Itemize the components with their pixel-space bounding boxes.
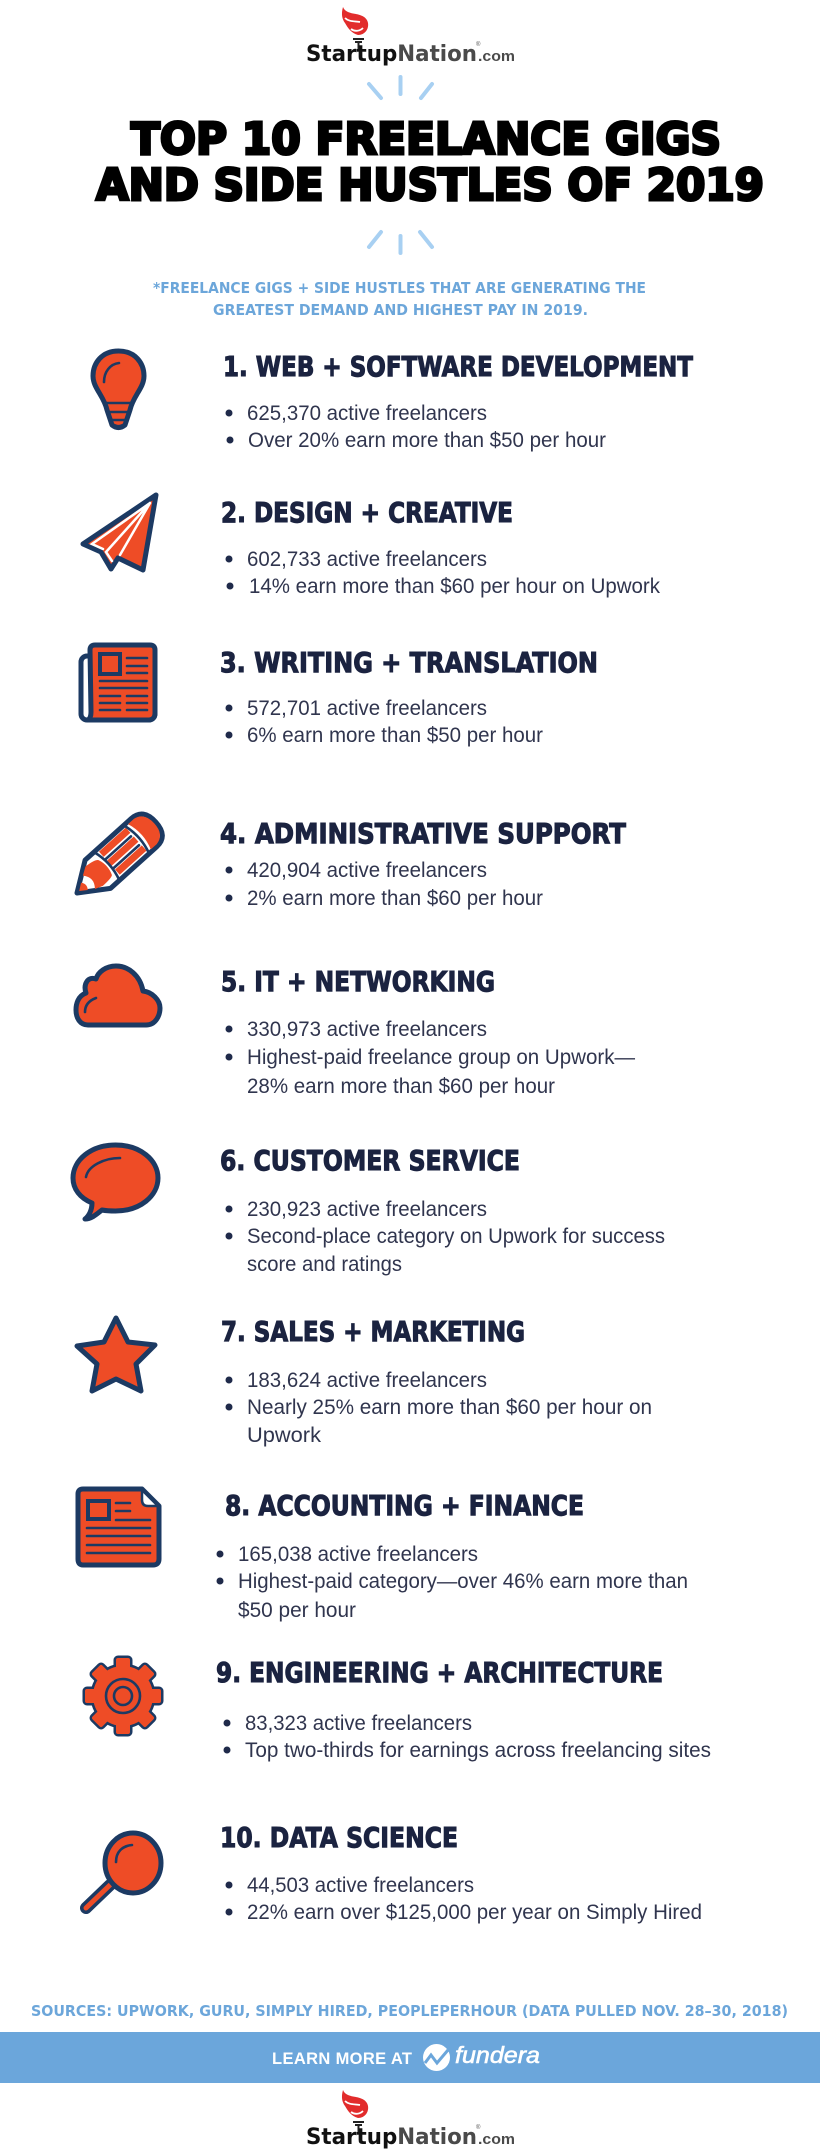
text block 3 <box>226 696 543 747</box>
text block 3: 6% earn more than $50 per hour <box>247 723 543 747</box>
call to action band <box>0 2032 820 2083</box>
text block 8: $50 per hour <box>238 1598 356 1622</box>
text block 7: Nearly 25% earn more than $60 per hour on <box>247 1395 652 1419</box>
text block 2 <box>226 547 660 598</box>
heading 6: 6. CUSTOMER SERVICE <box>220 1144 520 1177</box>
text block 6: 230,923 active freelancers <box>247 1197 487 1221</box>
item 7: sales and marketing <box>77 1315 652 1447</box>
heading 7: 7. SALES + MARKETING <box>221 1315 525 1348</box>
heading 10: 10. DATA SCIENCE <box>220 1821 458 1854</box>
text block 8: Highest-paid category—over 46% earn more than <box>238 1569 688 1593</box>
text block 5: 28% earn more than $60 per hour <box>247 1074 555 1098</box>
text block 10: 44,503 active freelancers <box>247 1873 474 1897</box>
icon: newspaper <box>81 645 155 720</box>
item 2: design and creative <box>83 495 660 598</box>
item 3: writing and translation <box>81 645 598 747</box>
text block 7: 183,624 active freelancers <box>247 1368 487 1392</box>
heading 8: 8. ACCOUNTING + FINANCE <box>225 1489 584 1522</box>
item 10: data science <box>86 1821 702 1924</box>
text block 10: 22% earn over $125,000 per year on Simply Hired <box>247 1900 702 1924</box>
text block 1 <box>226 401 606 452</box>
text block 5 <box>226 1017 635 1098</box>
logo: StartupNation top: StartupNation <box>306 42 477 67</box>
subtitle: *FREELANCE GIGS + SIDE HUSTLES THAT ARE GENERATING THE <box>153 279 646 297</box>
heading 9: 9. ENGINEERING + ARCHITECTURE <box>216 1656 663 1689</box>
icon: cloud <box>76 966 160 1025</box>
text block 9: 83,323 active freelancers <box>245 1711 472 1735</box>
heading 1: 1. WEB + SOFTWARE DEVELOPMENT <box>223 350 693 383</box>
item 4: administrative support <box>64 808 626 910</box>
text block 5: Highest-paid freelance group on Upwork— <box>247 1045 635 1069</box>
icon: document <box>78 1489 159 1565</box>
sources line: SOURCES: UPWORK, GURU, SIMPLY HIRED, PEOPLEPERHOUR (DATA PULLED NOV. 28–30, 2018) <box>31 2002 788 2020</box>
subtitle <box>153 279 646 319</box>
item 8: accounting and finance <box>78 1489 688 1622</box>
text block 2: 14% earn more than $60 per hour on Upwork <box>249 574 660 598</box>
logo: StartupNation bottom: StartupNation <box>306 2125 477 2150</box>
logo: StartupNation bottom: .com <box>478 2131 515 2148</box>
text block 1: 625,370 active freelancers <box>247 401 487 425</box>
call to action band: LEARN MORE AT <box>272 2050 412 2068</box>
item 5: IT and networking <box>76 965 635 1098</box>
icon: light bulb <box>93 351 144 428</box>
heading 4: 4. ADMINISTRATIVE SUPPORT <box>220 817 626 850</box>
text block 2: 602,733 active freelancers <box>247 547 487 571</box>
decorative rays below title <box>369 232 432 253</box>
title: TOP 10 FREELANCE GIGS <box>131 115 721 165</box>
text block 7 <box>226 1368 652 1447</box>
icon: magnifying glass <box>86 1833 161 1908</box>
text block 6 <box>226 1197 665 1276</box>
text block 6: score and ratings <box>247 1252 402 1276</box>
subtitle: GREATEST DEMAND AND HIGHEST PAY IN 2019. <box>213 301 588 319</box>
logo: StartupNation top: .com <box>478 48 515 65</box>
item 1: web and software development <box>93 350 693 452</box>
title: AND SIDE HUSTLES OF 2019 <box>96 161 764 211</box>
text block 1: Over 20% earn more than $50 per hour <box>248 428 606 452</box>
heading 3: 3. WRITING + TRANSLATION <box>220 646 598 679</box>
text block 7: Upwork <box>247 1423 321 1447</box>
heading 2: 2. DESIGN + CREATIVE <box>221 496 513 529</box>
logo: StartupNation top: ® <box>476 41 481 48</box>
icon: paper plane <box>83 495 156 570</box>
icon: speech bubble <box>73 1145 158 1219</box>
icon: pencil <box>64 808 168 907</box>
logo: StartupNation bottom <box>306 2090 515 2150</box>
text block 10 <box>226 1873 702 1924</box>
logo: StartupNation bottom: ® <box>476 2124 481 2131</box>
item 6: customer service <box>73 1144 665 1276</box>
call to action band: fundera <box>455 2042 540 2068</box>
title <box>96 115 764 211</box>
logo: StartupNation top <box>306 7 515 67</box>
decorative rays above title <box>369 77 432 98</box>
text block 5: 330,973 active freelancers <box>247 1017 487 1041</box>
text block 4 <box>226 858 543 910</box>
icon: gear <box>85 1658 161 1734</box>
text block 8: 165,038 active freelancers <box>238 1542 478 1566</box>
text block 9 <box>224 1711 711 1762</box>
heading 5: 5. IT + NETWORKING <box>221 965 495 998</box>
text block 8 <box>216 1542 688 1622</box>
text block 6: Second-place category on Upwork for success <box>247 1224 665 1248</box>
text block 9: Top two-thirds for earnings across freelancing sites <box>245 1738 711 1762</box>
text block 4: 420,904 active freelancers <box>247 858 487 882</box>
icon: star <box>77 1318 155 1391</box>
text block 4: 2% earn more than $60 per hour <box>247 886 543 910</box>
item 9: engineering and architecture <box>85 1656 711 1762</box>
text block 3: 572,701 active freelancers <box>247 696 487 720</box>
icon: fundera logo <box>423 2044 450 2071</box>
